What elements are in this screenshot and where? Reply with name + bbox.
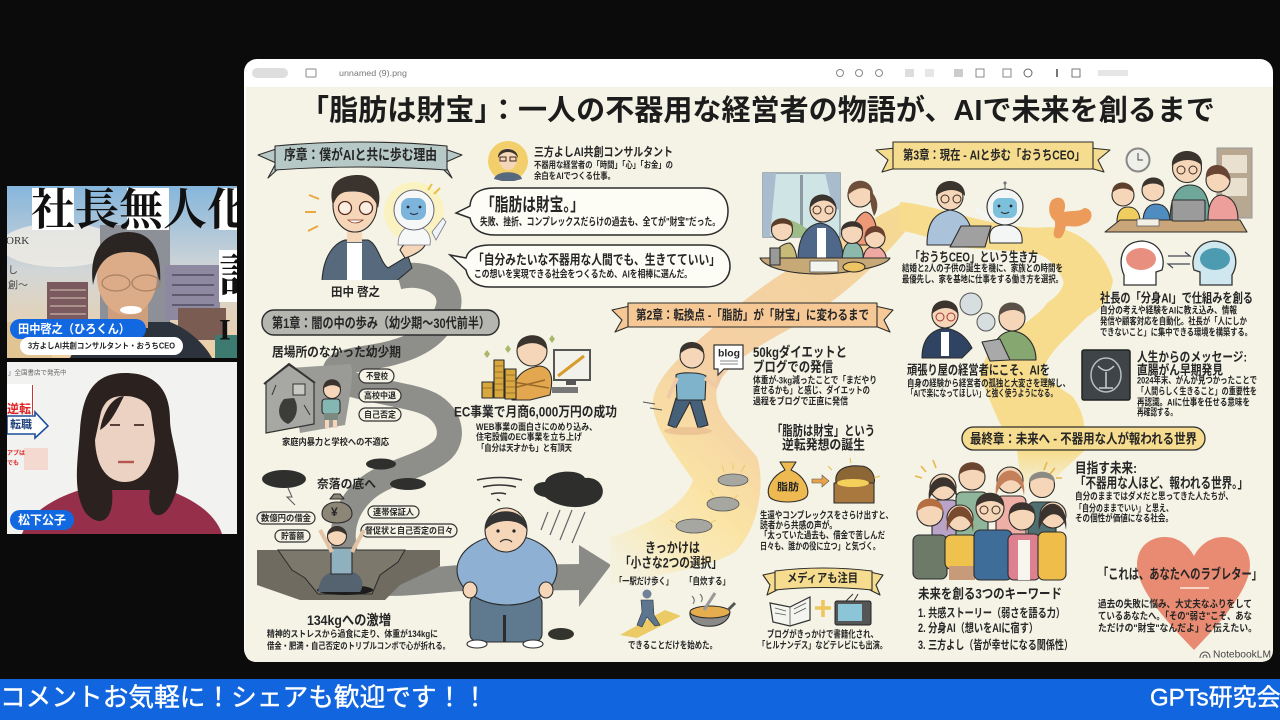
text: EC success: EC事業で月商6,000万円の成功 (454, 404, 617, 420)
heading: reversal idea: 「脂肪は財宝」という (772, 424, 875, 438)
text: media body: 「ヒルナンデス」などテレビにも出演。 (758, 640, 887, 652)
text: target future: 「自分のままでいい」と思え、 (1075, 502, 1173, 514)
heading: reversal idea: 逆転発想の誕生 (782, 436, 865, 452)
avatar: consultant badge (488, 141, 528, 181)
illustration: cooking pot (690, 593, 735, 626)
heading: childhood: 居場所のなかった幼少期 (272, 344, 401, 360)
icon: orange dog (1049, 198, 1092, 238)
book promo (7, 384, 48, 470)
stepping stones (670, 463, 748, 533)
text: three keywords: 3. 三方よし（皆が幸せになる関係性） (918, 637, 1073, 652)
text: target future (1075, 460, 1248, 524)
tag: savings (275, 530, 310, 542)
book promo: 逆転 (7, 401, 31, 416)
clouds: abyss (262, 458, 426, 505)
overlay title text (7, 187, 237, 340)
text: home CEO: 「おうちCEO」という生き方 (910, 250, 1038, 264)
text: reversal body: 日々も、誰かの役に立つ」と気づく。 (760, 540, 880, 552)
speech bubble: fat is treasure: 失敗、挫折、コンプレックスだらけの過去も、全てが"財宝"だった。 (480, 215, 720, 228)
text: home CEO: 結婚と2人の子供の誕生を機に、家族との時間を (902, 262, 1063, 274)
speech bubble: fat is treasure (456, 188, 728, 235)
name label: Matsushita (10, 510, 74, 530)
text: reversal body: 生還やコンプレックスをさらけ出すと、 (760, 510, 893, 522)
text: 134 kg: 精神的ストレスから過食に走り、体重が134kgに (267, 628, 438, 639)
text: two small choices: 「一駅だけ歩く」 (615, 576, 673, 588)
text: hard-working managers: 頑張り屋の経営者にこそ、AIを (907, 362, 1050, 378)
name label: Tanaka (10, 319, 183, 355)
speaker Tanaka (70, 232, 212, 358)
text: two small choices: 「小さな2つの選択」 (620, 554, 722, 570)
heading: abyss: 奈落の底へ (317, 476, 376, 491)
name label: Tanaka: 田中啓之（ひろくん） (18, 321, 130, 336)
icon: plus (815, 600, 831, 617)
text: home CEO: 最優先し、家を基地に仕事をする働き方を選択。 (902, 274, 1063, 286)
window toolbar: unnamed (9).png (339, 68, 407, 78)
text: message from life: 人生からのメッセージ: (1137, 350, 1247, 364)
video tile: Tanaka (7, 186, 237, 358)
tag: self denial (359, 408, 401, 421)
icon: book (770, 597, 810, 626)
speech bubble: clumsy people (450, 245, 730, 287)
love letter with heart: ただけの"財宝"なんだよ」と伝えたい。 (1098, 622, 1257, 634)
text: two small choices: 「自炊する」 (685, 576, 730, 588)
text: three keywords: 2. 分身AI（想いをAIに宿す） (918, 620, 1038, 635)
character: Tanaka with robot (305, 175, 446, 288)
illustration: treasure chest (828, 458, 880, 503)
text: three keywords: 未来を創る3つのキーワード (918, 586, 1062, 602)
text: three keywords: 1. 共感ストーリー（弱さを語る力） (918, 605, 1065, 620)
pill: final chapter: 最終章：未来へ - 不器用な人が報われる世界 (970, 430, 1197, 446)
pill: chapter 1: 第1章：闇の中の歩み（幼少期〜30代前半） (272, 315, 490, 331)
tag: self denial: 自己否定 (364, 410, 396, 420)
name label: Matsushita: 松下公子 (18, 512, 66, 527)
illustration: family with laptop (1105, 148, 1252, 232)
text: two small choices: きっかけは (645, 540, 700, 556)
text: hard-working managers (907, 362, 1070, 400)
illustration: money bag labelled fat: 脂肪 (777, 480, 799, 494)
tag: dropout (359, 389, 401, 402)
consultant description (534, 144, 673, 181)
text: diet and blog (753, 344, 877, 408)
tag: guarantor: 連帯保証人 (373, 507, 414, 517)
pill: chapter 1 (262, 310, 499, 335)
illustration: pit with debtor (257, 494, 440, 600)
overlay title text: ORK (6, 235, 29, 247)
icon: MRI scan (1082, 350, 1130, 400)
text: EC success: 住宅設備のEC事業を立ち上げ (476, 431, 582, 442)
icon: television (835, 594, 871, 625)
text: target future: その個性が価値になる社会。 (1075, 512, 1173, 524)
text: home CEO (902, 250, 1063, 286)
text: message from life: 再確認する。 (1137, 406, 1177, 418)
text: 134 kg (267, 612, 450, 651)
love letter with heart: 過去の失敗に悩み、大丈夫なふりをして (1098, 598, 1252, 610)
love letter with heart (1098, 537, 1262, 650)
tag: huge debt: 数億円の借金 (261, 513, 311, 523)
speech bubble: clumsy people: この想いを実現できる社会をつくるため、AIを相棒に選んだ。 (474, 268, 692, 280)
illustration: consulting two managers (922, 293, 1036, 361)
road: dark grey path (335, 275, 611, 607)
illustration: group of people (913, 460, 1066, 580)
overlay title text: 社長無人化 (31, 186, 251, 234)
text: media body: ブログがきっかけで書籍化され、 (767, 628, 878, 640)
overlay title text: I (219, 314, 231, 346)
text: hard-working managers: 「AIで楽になってほしい」と強く使うようになる。 (907, 388, 1057, 400)
bottom ticker bar: コメントお気軽に！シェアも歓迎です！！ (0, 684, 488, 712)
illustration: pit with debtor: ¥ (331, 505, 338, 519)
bottom ticker bar (0, 679, 1280, 720)
text: alter-ego AI (1100, 290, 1253, 338)
book promo: アプは (7, 450, 25, 457)
text: target future: 自分のままではダメだと思ってきた人たちが、 (1075, 490, 1233, 502)
arrow: fat to treasure (812, 475, 829, 487)
illustration: walking man with blog (643, 342, 743, 435)
tag: savings: 貯蓄額 (281, 531, 304, 541)
bottom ticker bar: GPTs研究会 (1150, 684, 1280, 712)
consultant description: 三方よしAI共創コンサルタント (534, 144, 673, 159)
illustration: broken house and child (264, 364, 352, 433)
name: Tanaka: 田中 啓之 (331, 284, 380, 299)
consultant description: 余白をAIでつくる仕事。 (534, 170, 615, 181)
overlay title text: 計 (219, 252, 263, 300)
consultant description: 不器用な経営者の「時間」「心」「お金」の (534, 159, 673, 170)
ribbon: chapter 3: 第3章：現在 - AIと歩む「おうちCEO」 (903, 148, 1085, 162)
tag: truancy: 不登校 (366, 371, 388, 381)
caption: what could be done: できることだけを始めた。 (628, 640, 717, 652)
illustration: EC success with coins and monitor (482, 335, 590, 400)
window toolbar (252, 68, 1128, 78)
illustration: home CEO with robot (927, 181, 1023, 247)
illustration: walking man with blog: blog (718, 348, 740, 360)
road: warm path (610, 202, 1113, 585)
illustration: walking on one station (620, 590, 681, 638)
ribbon: media (763, 568, 883, 595)
text: diet and blog: 体重が-3kg減ったことで「まだやり (753, 374, 877, 386)
text: diet and blog: 直せるかも」と感じ、ダイエットの (753, 384, 870, 396)
text: diet and blog: 過程をブログで正直に発信 (753, 396, 848, 408)
speech bubble: clumsy people: 「自分みたいな不器用な人間でも、生きてていい」 (473, 252, 720, 268)
text: EC success: 「自分は天才かも」と有頂天 (477, 442, 572, 453)
text: diet and blog: 50kgダイエットと (753, 344, 847, 360)
overlay title text: 創〜 (8, 280, 28, 292)
speaker Matsushita (22, 373, 222, 534)
text: message from life (1137, 350, 1257, 418)
text: two small choices (615, 540, 730, 588)
overlay title text: し (8, 264, 18, 276)
infographic window (244, 59, 1273, 662)
video tile: Matsushita: 」全国書店で発売中 (8, 368, 66, 376)
ribbon: chapter 2: 第2章：転換点 -「脂肪」が「財宝」に変わるまで (636, 308, 869, 322)
tag: guarantor (368, 506, 419, 518)
text: reversal body: 「太っていた過去も、借金で苦しんだ (760, 530, 885, 542)
text: media body (758, 628, 887, 652)
pill: final chapter (962, 427, 1205, 450)
illustration: brains and arrows (1121, 241, 1236, 285)
heading: reversal idea (772, 424, 875, 452)
text: EC success: WEB事業の面白さにのめり込み、 (476, 421, 597, 432)
tag: truancy (359, 369, 394, 383)
ribbon: media: メディアも注目 (787, 570, 858, 585)
title: 「脂肪は財宝」：一人の不器用な経営者の物語が、AIで未来を創るまで (300, 93, 1215, 127)
book promo: 転職 (10, 417, 32, 431)
text: reversal body (760, 510, 893, 552)
name label: Tanaka: 3方よしAI共創コンサルタント・おうちCEO (28, 340, 175, 350)
ribbon: chapter 3 (876, 142, 1110, 172)
ribbon: prologue: 序章：僕がAIと共に歩む理由 (284, 146, 437, 164)
text: message from life: 再認識。AIに仕事を任せる意味を (1137, 396, 1250, 408)
illustration: money bag labelled fat (768, 462, 808, 502)
text: diet and blog: ブログでの発信 (753, 359, 833, 375)
love letter with heart: ているあなたへ。「その"弱さ"こそ、あな (1098, 610, 1252, 622)
text: 134 kg: 借金・肥満・自己否定のトリプルコンボで心が折れる。 (267, 640, 450, 651)
illustration: 134 kg man with storm (457, 472, 603, 648)
ribbon: prologue (258, 142, 462, 178)
caption: childhood: 家庭内暴力と学校への不適応 (282, 436, 389, 447)
book promo: でも (7, 460, 19, 467)
speech bubble: fat is treasure: 「脂肪は財宝。」 (481, 195, 584, 215)
video tile: Matsushita (7, 362, 237, 534)
text: alter-ego AI: 自分の考えや経験をAIに教え込み、情報 (1100, 304, 1237, 316)
text: message from life: 直腸がん早期発見 (1137, 362, 1223, 378)
logo: NotebookLM: NotebookLM (1213, 650, 1271, 660)
ribbon: chapter 2 (612, 303, 893, 332)
text: target future: 目指す未来: (1075, 460, 1137, 476)
text: hard-working managers: 自身の経験から経営者の孤独と大変さを理解し、 (907, 378, 1070, 390)
text: three keywords (918, 586, 1073, 652)
text: reversal body: 読者から共感の声が。 (760, 520, 837, 532)
tag: demand letters: 督促状と自己否定の日々 (365, 526, 453, 536)
tag: dropout: 高校中退 (364, 390, 396, 400)
text: EC success (454, 404, 617, 453)
illustration: family at table (760, 173, 890, 274)
text: 134 kg: 134kgへの激増 (307, 612, 391, 628)
